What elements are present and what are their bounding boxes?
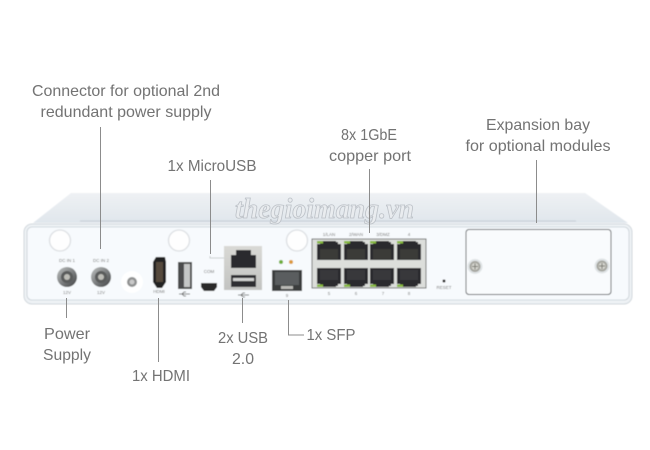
label: USB: 2.0 [232,351,254,368]
label: redundant power connector: Connector for optional 2nd [32,83,220,100]
label: copper ports: 8x 1GbE [341,127,397,144]
8-port gigabit ethernet block: 4 [408,232,411,237]
label: SFP [288,300,356,344]
label: power supply: Supply [43,347,91,364]
label: expansion bay: Expansion bay [486,117,590,134]
8-port gigabit ethernet block: 2/WAN [349,232,363,237]
8-port gigabit ethernet block: 7 [382,291,385,296]
label: USB [218,298,268,368]
MicroUSB port [201,283,217,291]
label: copper ports [329,127,412,233]
power connector DC IN 2: DC IN 2 [93,258,109,263]
device chassis [24,193,632,304]
HDMI port: HDMI [153,289,165,294]
power connector DC IN 1: DC IN 1 [59,258,75,263]
reset button [436,280,452,290]
ground screw [121,271,143,293]
round feet [50,230,308,251]
label: expansion bay [466,117,610,223]
8-port gigabit ethernet block [312,232,426,296]
label: MicroUSB: 1x MicroUSB [168,158,256,175]
label: HDMI: 1x HDMI [132,368,190,385]
8-port gigabit ethernet block: 6 [355,291,358,296]
chassis front panel [24,224,632,304]
power connector DC IN 2 [91,258,111,295]
chassis top face [33,193,628,223]
COM label and bracket [204,256,224,274]
HDMI port [153,257,166,294]
power connector DC IN 1 [57,258,77,295]
RJ45 and USB stack [224,246,262,297]
label: redundant power connector: redundant power supply [40,104,212,121]
label: expansion bay: for optional modules [466,138,610,155]
watermark: thegioimang.vn [235,194,414,225]
COM label and bracket: COM [204,269,214,274]
label: HDMI [132,298,190,385]
expansion bay [466,230,611,294]
8-port gigabit ethernet block: 1/LAN [323,232,335,237]
label: power supply [43,298,91,364]
SFP port [272,260,302,298]
8-port gigabit ethernet block: 3/DMZ [376,232,390,237]
label: redundant power connector [32,83,220,249]
USB port [178,262,192,296]
power connector DC IN 2: 12V [97,290,105,295]
SFP port: 9 [286,293,289,298]
label: USB: 2x USB [218,330,268,347]
reset button: RESET [436,285,452,290]
label: power supply: Power [44,326,91,343]
label: MicroUSB [168,158,256,254]
8-port gigabit ethernet block: 5 [328,291,331,296]
8-port gigabit ethernet block: 8 [408,291,411,296]
power connector DC IN 1: 12V [63,290,71,295]
label: SFP: 1x SFP [306,327,356,344]
label: copper ports: copper port [329,148,412,165]
